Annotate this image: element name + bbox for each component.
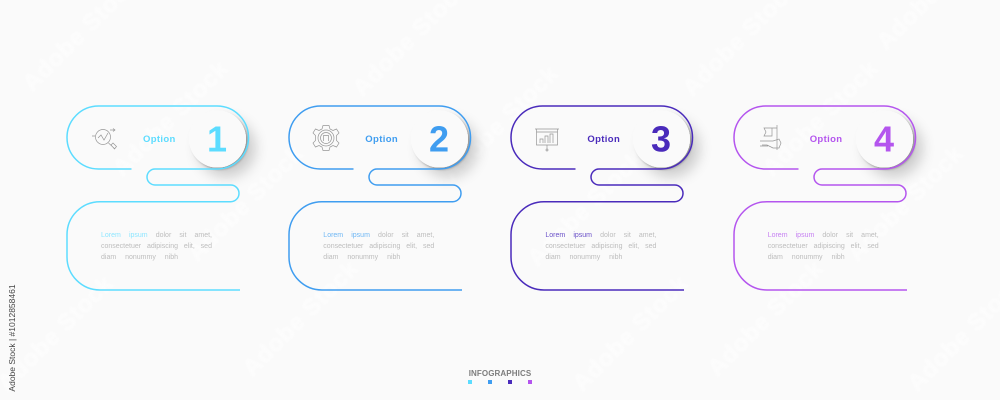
body text 2: consectetuer bbox=[323, 243, 363, 250]
number badge 4 bbox=[856, 110, 913, 168]
text: Adobe Stock bbox=[702, 255, 829, 382]
option label 4: Option bbox=[810, 134, 842, 144]
body text 1: Lorem bbox=[101, 232, 121, 239]
text: Adobe Stock bbox=[757, 55, 884, 182]
body text 4: ipsum bbox=[796, 232, 814, 239]
number badge 3 bbox=[633, 110, 690, 168]
body text 4: diam bbox=[768, 254, 783, 261]
legend dot purple bbox=[528, 380, 532, 384]
body text 4: sed bbox=[867, 243, 879, 250]
panel: option 1 bbox=[66, 105, 260, 291]
body text 4: adipiscing bbox=[814, 243, 845, 250]
stock credit: Adobe Stock | #1012858461 bbox=[7, 284, 17, 392]
body text 1: dolor bbox=[156, 232, 171, 239]
body text 3: adipiscing bbox=[591, 243, 622, 250]
option label 2: Option bbox=[365, 134, 398, 144]
body text 3: consectetuer bbox=[545, 243, 585, 250]
body text 4: dolor bbox=[822, 232, 838, 239]
body text 1: nonummy bbox=[125, 254, 156, 261]
body text 4: nonummy bbox=[792, 254, 823, 261]
text: Adobe Stock bbox=[567, 270, 694, 397]
text: Adobe Stock bbox=[522, 145, 649, 272]
body text 3 bbox=[545, 232, 656, 261]
icon: hand holding flag bbox=[760, 125, 781, 150]
body text 2: diam bbox=[323, 254, 338, 261]
body text 2: nonummy bbox=[347, 254, 378, 261]
body text 3: nonummy bbox=[570, 254, 600, 261]
body text 1 bbox=[101, 232, 212, 261]
body text 1: amet, bbox=[194, 232, 212, 239]
number badge 4: 4 bbox=[874, 118, 894, 160]
body text 2: adipiscing bbox=[369, 243, 400, 250]
body text 3: sed bbox=[645, 243, 656, 250]
body text 2: nibh bbox=[387, 254, 400, 261]
body text 3: ipsum bbox=[573, 232, 592, 239]
icon: magnifier with chart bbox=[92, 128, 116, 149]
body text 2: sit bbox=[402, 232, 409, 239]
body text 2: elit, bbox=[406, 243, 417, 250]
body text 4: nibh bbox=[831, 254, 845, 261]
body text 4: amet, bbox=[861, 232, 879, 239]
body text 4: elit, bbox=[851, 243, 862, 250]
footer heading: INFOGRAPHICS bbox=[469, 369, 531, 378]
body text 1: elit, bbox=[184, 243, 195, 250]
body text 3: elit, bbox=[628, 243, 639, 250]
connector outline 1 bbox=[67, 106, 249, 290]
body text 2: Lorem bbox=[323, 232, 343, 239]
body text 1: nibh bbox=[165, 254, 178, 261]
connector outline 3 bbox=[511, 106, 693, 290]
body text 3: amet, bbox=[639, 232, 656, 239]
legend dot indigo bbox=[508, 380, 512, 384]
body text 1: consectetuer bbox=[101, 243, 141, 250]
body text 1: sit bbox=[179, 232, 186, 239]
option label 1: Option bbox=[143, 134, 176, 144]
body text 3: sit bbox=[624, 232, 631, 239]
text: Adobe Stock bbox=[107, 55, 234, 182]
body text 4: Lorem bbox=[768, 232, 788, 239]
connector outline 2 bbox=[289, 106, 471, 290]
body text 3: diam bbox=[545, 254, 561, 261]
body text 4: consectetuer bbox=[768, 243, 808, 250]
body text 2: ipsum bbox=[351, 232, 370, 239]
body text 2: sed bbox=[423, 243, 434, 250]
body text 4: sit bbox=[846, 232, 853, 239]
legend dot cyan bbox=[468, 380, 472, 384]
body text 3: dolor bbox=[600, 232, 616, 239]
text: Adobe Stock bbox=[237, 255, 364, 382]
text: Adobe Stock bbox=[182, 140, 309, 267]
body text 1: diam bbox=[101, 254, 116, 261]
body text 2 bbox=[323, 232, 434, 261]
body text 3: Lorem bbox=[545, 232, 565, 239]
body text 1: ipsum bbox=[129, 232, 148, 239]
icon: gear with fist bbox=[313, 126, 339, 150]
legend dot blue bbox=[488, 380, 492, 384]
text: Adobe Stock bbox=[842, 140, 969, 267]
body text 2: amet, bbox=[417, 232, 434, 239]
body text 3: nibh bbox=[609, 254, 622, 261]
connector outline 4 bbox=[734, 106, 915, 290]
number badge 1 bbox=[189, 110, 246, 168]
number badge 1: 1 bbox=[207, 118, 227, 160]
icon: presentation board bbox=[535, 129, 559, 151]
option label 3: Option bbox=[587, 134, 620, 144]
body text 1: sed bbox=[201, 243, 212, 250]
number badge 2 bbox=[411, 110, 468, 168]
text: Adobe Stock bbox=[437, 60, 564, 187]
panel: option 2 bbox=[288, 105, 482, 291]
body text 4 bbox=[768, 232, 879, 261]
panel: option 3 bbox=[510, 105, 704, 291]
number badge 2: 2 bbox=[429, 118, 449, 160]
number badge 3: 3 bbox=[651, 118, 671, 160]
body text 1: adipiscing bbox=[147, 243, 178, 250]
panel: option 4 bbox=[733, 105, 928, 291]
body text 2: dolor bbox=[378, 232, 394, 239]
